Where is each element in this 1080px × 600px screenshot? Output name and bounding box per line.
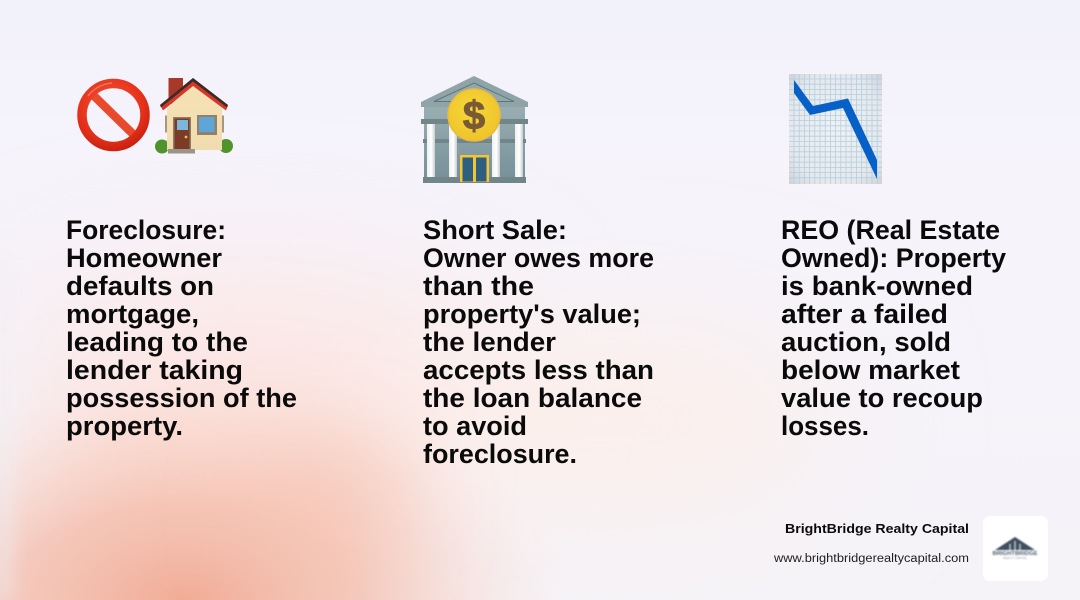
text: REO description: REO (Real Estate bbox=[781, 215, 1000, 245]
text: short sale description: property's value; bbox=[423, 299, 641, 329]
panel: short sale bbox=[421, 76, 654, 469]
icon: prohibited sign bbox=[82, 83, 145, 146]
icon: bank with dollar coin: $ bbox=[463, 94, 485, 138]
text: REO description bbox=[781, 215, 1006, 441]
logo card: BRIGHTBRIDGE bbox=[992, 551, 1038, 557]
company name: BrightBridge Realty Capital bbox=[785, 521, 969, 536]
text: REO description: auction, sold bbox=[781, 327, 951, 357]
text: foreclosure description: defaults on bbox=[66, 271, 214, 301]
icon: house bbox=[155, 78, 233, 154]
logo card: REALTY CAPITAL bbox=[1003, 556, 1027, 560]
text: short sale description: Short Sale: bbox=[423, 215, 567, 245]
panel: REO bbox=[781, 74, 1006, 441]
text: foreclosure description bbox=[66, 215, 297, 441]
text: REO description: below market bbox=[781, 355, 960, 385]
text: foreclosure description: mortgage, bbox=[66, 299, 199, 329]
text: REO description: after a failed bbox=[781, 299, 948, 329]
text: REO description: Owned): Property bbox=[781, 243, 1006, 273]
text: short sale description: the loan balance bbox=[423, 383, 642, 413]
website url: www.brightbridgerealtycapital.com bbox=[773, 553, 969, 565]
text: short sale description: foreclosure. bbox=[423, 439, 577, 469]
footer: brand block bbox=[773, 516, 1048, 581]
icon: falling chart bbox=[789, 74, 882, 184]
text: short sale description: the lender bbox=[423, 327, 557, 357]
text: short sale description: Owner owes more bbox=[423, 243, 654, 273]
text: short sale description: than the bbox=[423, 271, 534, 301]
logo card bbox=[983, 516, 1048, 581]
text: foreclosure description: possession of the bbox=[66, 383, 297, 413]
text: short sale description bbox=[423, 215, 654, 469]
text: short sale description: to avoid bbox=[423, 411, 527, 441]
panel: foreclosure bbox=[66, 78, 297, 441]
text: foreclosure description: leading to the bbox=[66, 327, 248, 357]
text: REO description: value to recoup bbox=[781, 383, 983, 413]
text: short sale description: accepts less than bbox=[423, 355, 654, 385]
text: foreclosure description: property. bbox=[66, 411, 183, 441]
icon: bank with dollar coin bbox=[421, 76, 528, 183]
text: foreclosure description: lender taking bbox=[66, 355, 243, 385]
text: foreclosure description: Homeowner bbox=[66, 243, 222, 273]
text: foreclosure description: Foreclosure: bbox=[66, 215, 226, 245]
text: REO description: is bank-owned bbox=[781, 271, 973, 301]
text: REO description: losses. bbox=[781, 411, 869, 441]
